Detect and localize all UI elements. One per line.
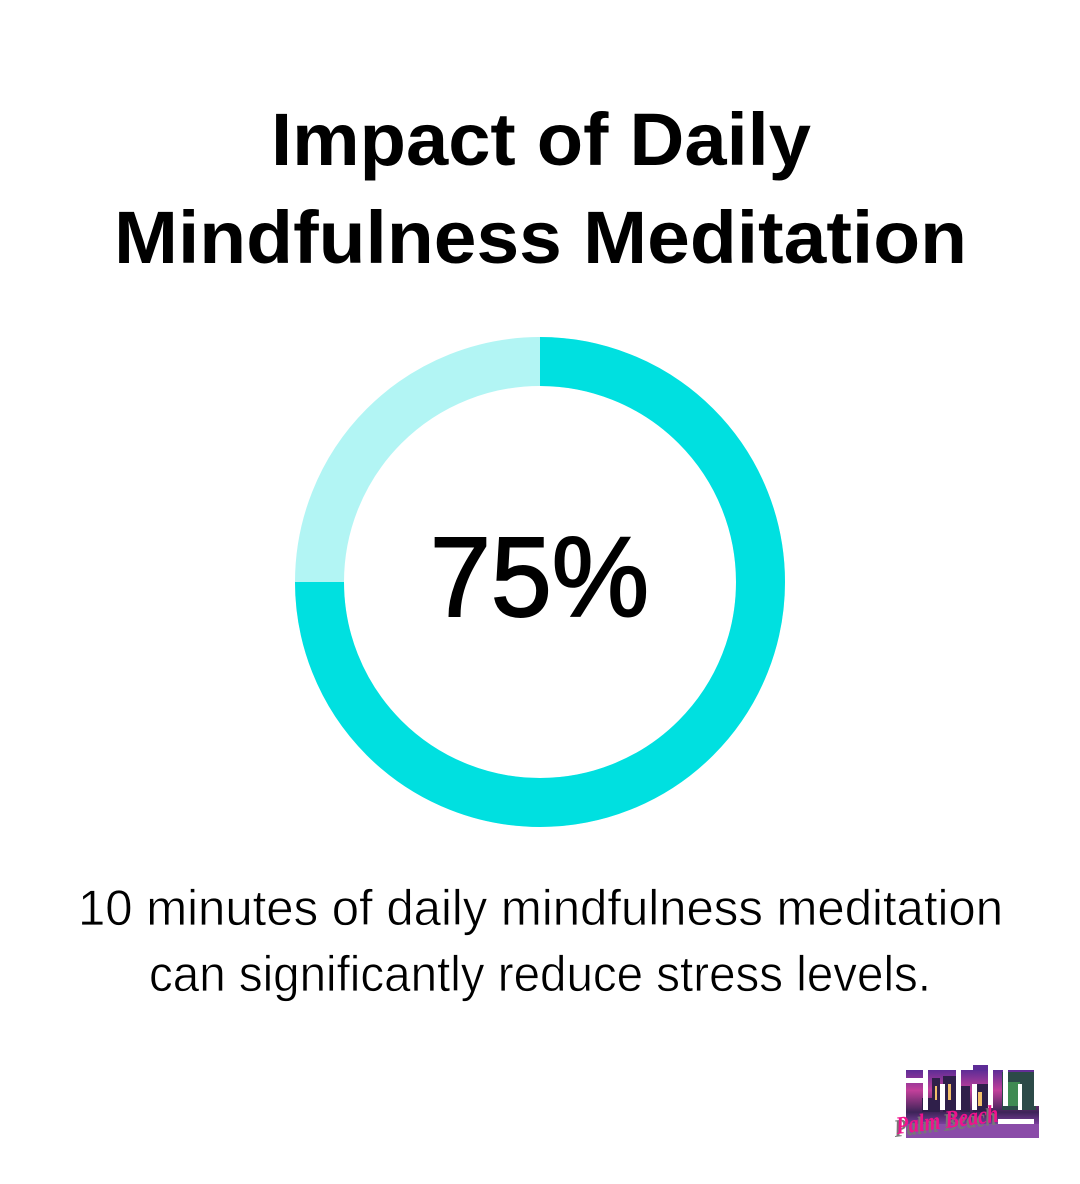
title: Impact of Daily [271,98,811,181]
title [114,98,967,279]
donut chart: 75% [320,362,760,802]
description [78,880,1003,1002]
logo [892,1065,1039,1143]
description: 10 minutes of daily mindfulness meditation [78,880,1003,936]
logo: Palm Beach [892,1104,998,1143]
title: Mindfulness Meditation [114,196,967,279]
logo: Palm Beach [894,1101,1000,1140]
description: can significantly reduce stress levels. [149,946,931,1002]
donut value: 75% [430,514,649,640]
